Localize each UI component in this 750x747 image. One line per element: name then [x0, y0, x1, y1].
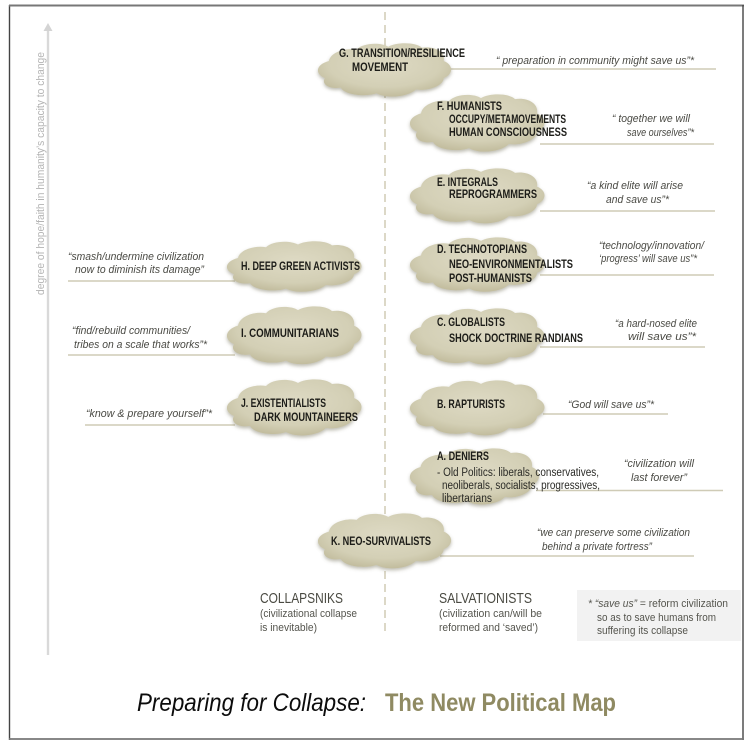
quote F: save ourselves”* — [627, 127, 695, 139]
cloud D: POST-HUMANISTS — [449, 273, 532, 285]
heading: collapsniks — [260, 591, 357, 634]
quote A — [536, 458, 723, 490]
vertical axis arrow with label — [35, 23, 52, 655]
quote D: “technology/innovation/ — [599, 240, 706, 252]
quote J: “know & prepare yourself”* — [86, 408, 213, 420]
cloud I: I. COMMUNITARIANS — [241, 328, 339, 340]
cloud J: J. EXISTENTIALISTS — [241, 398, 326, 410]
quote C: will save us”* — [628, 331, 697, 343]
title — [137, 689, 616, 717]
quote I — [68, 325, 235, 355]
cloud A: - Old Politics: liberals, conservatives, — [437, 467, 599, 479]
quote G: “ preparation in community might save us”* — [496, 55, 695, 67]
quote D — [540, 240, 714, 275]
quote K: behind a private fortress” — [542, 541, 653, 553]
cloud G: MOVEMENT — [352, 62, 408, 74]
quote H — [68, 251, 235, 281]
cloud E — [410, 168, 544, 223]
cloud K: K. NEO-SURVIVALISTS — [331, 536, 431, 548]
footnote box: suffering its collapse — [597, 625, 688, 637]
cloud C — [410, 308, 583, 364]
cloud A: A. DENIERS — [437, 451, 489, 463]
quote D: ‘progress’ will save us”* — [599, 253, 698, 265]
cloud A: neoliberals, socialists, progressives, — [442, 480, 600, 492]
heading: salvationists — [439, 591, 542, 634]
quote E: “a kind elite will arise — [587, 180, 683, 192]
cloud B — [410, 380, 544, 435]
heading: salvationists: SALVATIONISTS — [439, 591, 532, 607]
quote B — [543, 399, 668, 414]
quote K — [440, 527, 694, 556]
quote E: and save us”* — [606, 194, 670, 206]
quote F — [540, 113, 714, 144]
quote E — [540, 180, 715, 211]
cloud A — [410, 448, 600, 505]
cloud F — [410, 94, 567, 152]
cloud H: H. DEEP GREEN ACTIVISTS — [241, 261, 360, 273]
footnote box — [577, 590, 741, 641]
central dashed divider — [384, 12, 386, 632]
cloud E: E. INTEGRALS — [437, 177, 498, 189]
cloud C: C. GLOBALISTS — [437, 317, 505, 329]
quote I: “find/rebuild communities/ — [72, 325, 192, 337]
cloud G: G. TRANSITION/RESILIENCE — [339, 48, 465, 60]
cloud D — [410, 237, 573, 292]
axis label: degree of hope/faith in humanity’s capacity to change — [35, 52, 47, 295]
quote H: now to diminish its damage” — [75, 264, 205, 276]
quote B: “God will save us”* — [568, 399, 655, 411]
heading: collapsniks: is inevitable) — [260, 622, 317, 634]
heading: collapsniks: (civilizational collapse — [260, 608, 357, 620]
quote H: “smash/undermine civilization — [68, 251, 204, 263]
quote A: “civilization will — [624, 458, 694, 470]
cloud F: HUMAN CONSCIOUSNESS — [449, 127, 567, 139]
heading: salvationists: (civilization can/will be — [439, 608, 542, 620]
footnote box: so as to save humans from — [597, 612, 716, 624]
cloud E: REPROGRAMMERS — [449, 189, 537, 201]
quote F: “ together we will — [612, 113, 690, 125]
cloud A: libertarians — [442, 493, 492, 505]
cloud I — [227, 306, 362, 364]
cloud J: DARK MOUNTAINEERS — [254, 412, 358, 424]
heading: collapsniks: COLLAPSNIKS — [260, 591, 343, 607]
cloud F: OCCUPY/METAMOVEMENTS — [449, 114, 566, 126]
title: Preparing for Collapse: — [137, 689, 366, 717]
cloud D: D. TECHNOTOPIANS — [437, 244, 527, 256]
quote I: tribes on a scale that works”* — [74, 339, 208, 351]
quote K: “we can preserve some civilization — [537, 527, 690, 539]
footnote box: * “save us” = reform civilization — [588, 598, 728, 610]
cloud G — [318, 43, 465, 97]
cloud B: B. RAPTURISTS — [437, 399, 505, 411]
title: The New Political Map — [385, 689, 616, 717]
quote C: “a hard-nosed elite — [615, 318, 697, 330]
cloud D: NEO-ENVIRONMENTALISTS — [449, 259, 573, 271]
cloud C: SHOCK DOCTRINE RANDIANS — [449, 333, 583, 345]
cloud J — [227, 379, 362, 435]
quote A: last forever” — [631, 472, 688, 484]
cloud K — [318, 513, 451, 568]
cloud F: F. HUMANISTS — [437, 101, 502, 113]
heading: salvationists: reformed and ‘saved’) — [439, 622, 538, 634]
cloud H — [227, 241, 362, 292]
quote C — [540, 318, 705, 347]
